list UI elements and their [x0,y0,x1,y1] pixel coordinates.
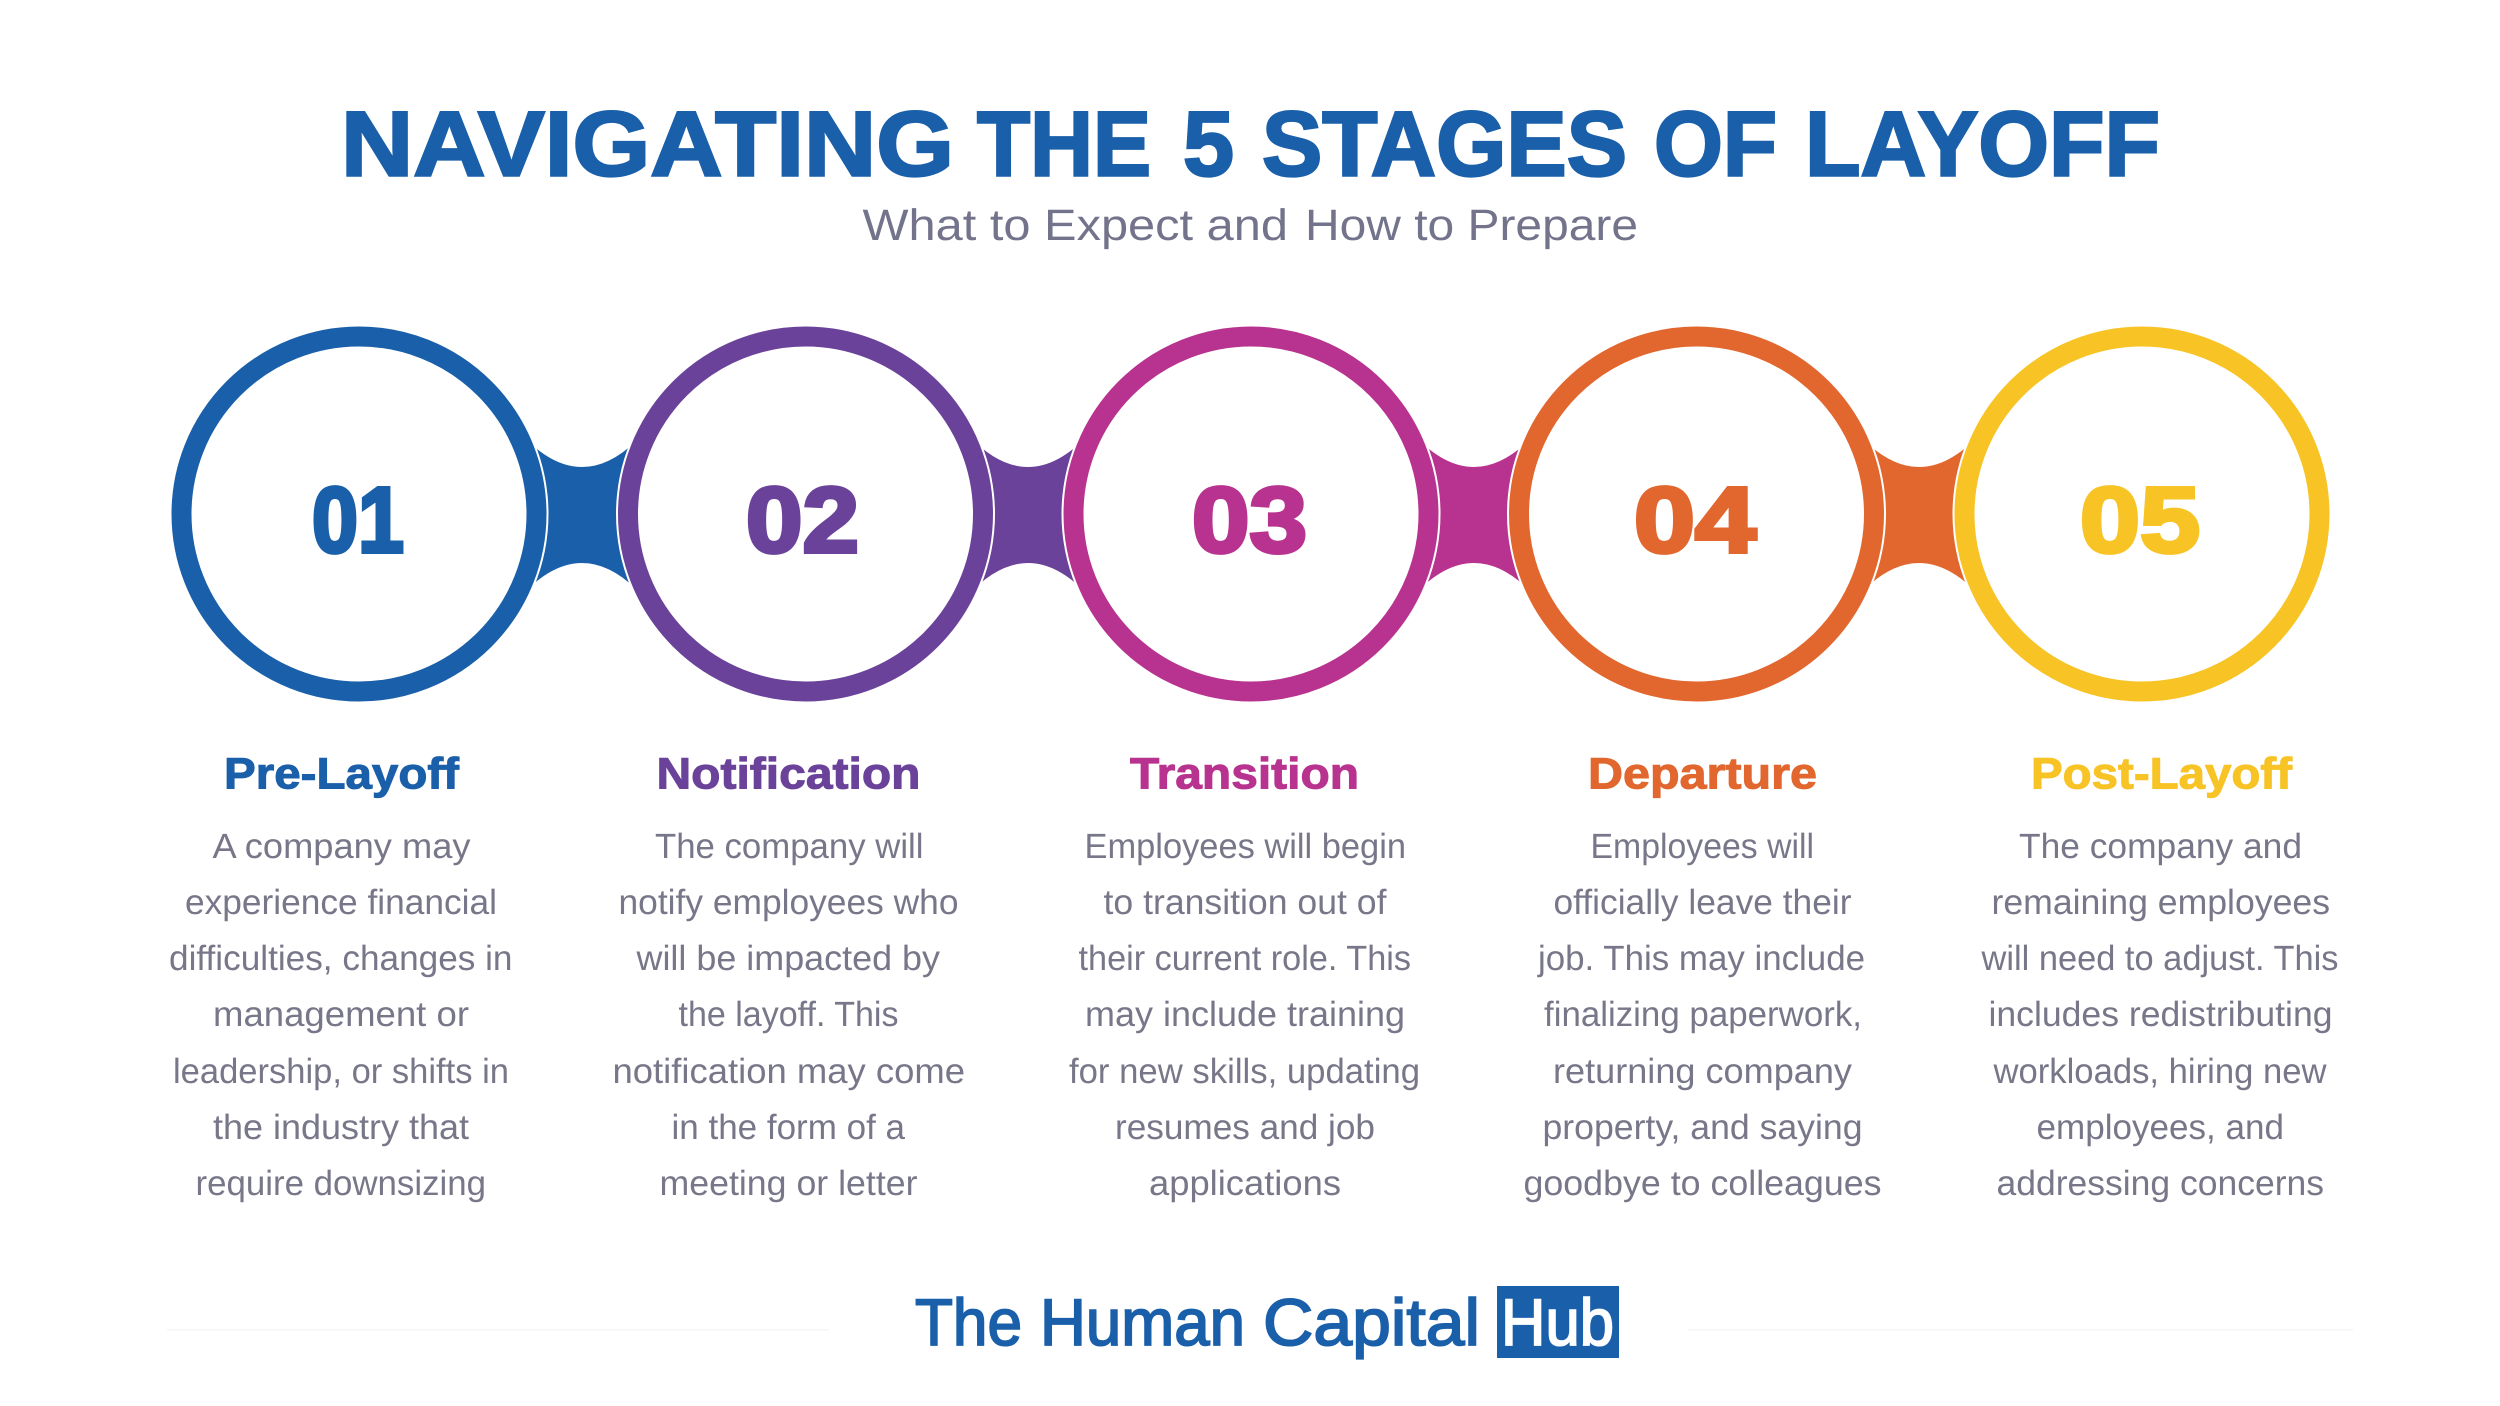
body text: Departure: job. This may include [1537,939,1865,978]
body text: Post-Layoff: includes redistributing [1988,995,2332,1034]
body text: Notification: in the form of a [672,1108,906,1147]
logo wordmark: Capital [1263,1285,1480,1359]
panel: stage 5 Post-Layoff [1952,324,2338,1203]
body text: Notification: notification may come [612,1052,965,1091]
body text: Pre-Layoff: A company may [212,827,471,866]
ring: stage 2 [616,324,995,704]
body text: Transition: may include training [1085,995,1405,1034]
body text: Post-Layoff: The company and [2019,827,2302,866]
body text: Departure: Employees will [1590,827,1814,866]
body text: Departure: officially leave their [1554,883,1852,922]
body text: Transition [1069,827,1420,1203]
ring: stage 1 [170,324,548,704]
body text: Pre-Layoff: experience financial [185,883,497,922]
body text: Transition: for new skills, updating [1069,1052,1420,1091]
title: THE [977,94,1151,196]
body text: Pre-Layoff: require downsizing [196,1164,486,1203]
body text: Departure: goodbye to colleagues [1524,1164,1882,1203]
body text: Post-Layoff: employees, and [2036,1108,2284,1147]
logo wordmark: The [915,1285,1022,1359]
body text: Transition: their current role. This [1078,939,1411,978]
body text: Departure: property, and saying [1542,1108,1862,1147]
subtitle [862,201,1638,250]
title: LAYOFF [1805,94,2160,196]
body text: Departure: finalizing paperwork, [1544,995,1862,1034]
body text: Post-Layoff [1981,827,2338,1203]
ring: stage 3 [1062,324,1440,704]
heading: Post-Layoff: Post-Layoff [2031,750,2292,798]
body text: Pre-Layoff: the industry that [213,1108,469,1147]
number 04: 04 [1634,468,1756,572]
body text: Post-Layoff: remaining employees [1992,883,2330,922]
body text: Pre-Layoff [169,827,512,1203]
heading: Transition: Transition [1130,750,1359,798]
connector: stage 1 to 2 [522,435,642,595]
body text: Transition: applications [1149,1164,1341,1203]
title: NAVIGATING [341,94,954,196]
connector: stage 2 to 3 [968,435,1088,595]
number 01: 01 [312,468,404,572]
body text: Notification: The company will [655,827,924,866]
logo wordmark [915,1285,1480,1359]
body text: Departure [1524,827,1882,1203]
logo wordmark: Human [1040,1285,1245,1359]
panel: stage 2 Notification [612,324,995,1203]
body text: Notification: notify employees who [618,883,958,922]
body text: Pre-Layoff: management or [213,995,469,1034]
number 03: 03 [1192,468,1307,572]
body text: Transition: to transition out of [1104,883,1387,922]
body text: Post-Layoff: addressing concerns [1996,1164,2324,1203]
title [341,94,2160,196]
body text: Pre-Layoff: difficulties, changes in [169,939,512,978]
title: 5 [1183,94,1234,196]
number 05: 05 [2080,468,2200,572]
connector: stage 3 to 4 [1414,435,1534,595]
subtitle: What to Expect and [862,201,1288,250]
heading: Departure: Departure [1588,750,1817,798]
body text: Notification: the layoff. This [678,995,898,1034]
body text: Post-Layoff: workloads, hiring new [1993,1052,2327,1091]
number 02: 02 [746,468,859,572]
heading: Notification: Notification [656,750,920,798]
logo: The Human Capital Hub [915,1285,1619,1359]
body text: Transition: Employees will begin [1084,827,1406,866]
title: STAGES [1262,94,1627,196]
body text: Notification [612,827,965,1203]
body text: Pre-Layoff: leadership, or shifts in [173,1052,509,1091]
ring: stage 5 [1952,324,2332,704]
title: OF [1654,94,1777,196]
panel: stage 3 Transition [1062,324,1440,1203]
subtitle: How to Prepare [1305,201,1638,250]
body text: Notification: will be impacted by [635,939,940,978]
heading: Pre-Layoff: Pre-Layoff [224,750,459,798]
logo badge: Hub: Hub [1501,1285,1614,1359]
body text: Departure: returning company [1553,1052,1853,1091]
connector: stage 4 to 5 [1859,435,1979,595]
panel: stage 1 Pre-Layoff [169,324,548,1203]
body text: Notification: meeting or letter [660,1164,918,1203]
body text: Post-Layoff: will need to adjust. This [1981,939,2338,978]
ring: stage 4 [1507,324,1886,704]
panel: stage 4 Departure [1507,324,1886,1203]
body text: Transition: resumes and job [1115,1108,1375,1147]
